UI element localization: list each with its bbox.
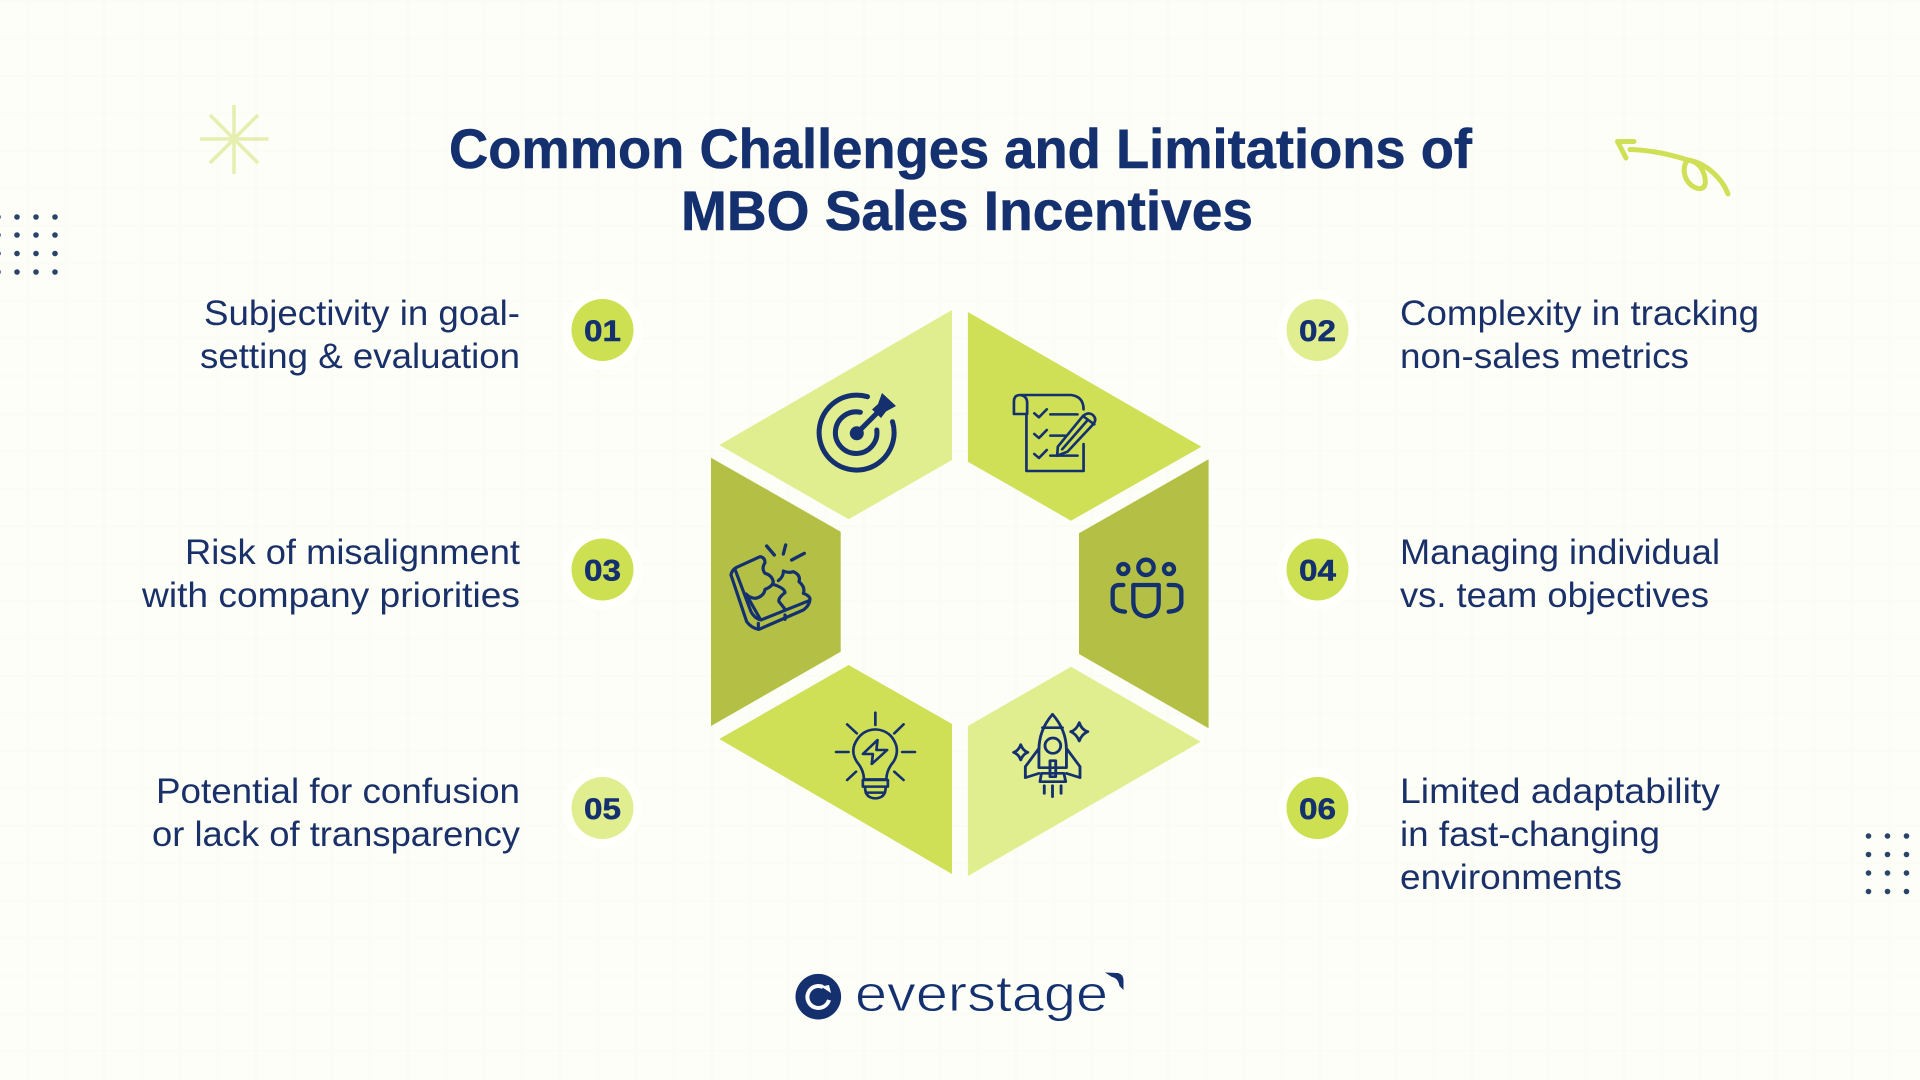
logo: everstage [796,965,1124,1022]
challenge 04 text: Managing individual [1400,533,1720,572]
challenge 02 text [1400,294,1759,376]
title: MBO Sales Incentives [681,179,1253,242]
challenge 01 text: Subjectivity in goal- [204,294,520,333]
icon: target with arrow [819,393,896,470]
logo wordmark: everstage [855,965,1108,1022]
segment: top right [968,312,1201,521]
segment: bottom left [719,665,952,874]
icon: checklist and pencil [1014,395,1095,471]
number badge 02 [1278,290,1358,370]
challenge 06 text [1400,772,1721,897]
number badge 06: 06 [1299,793,1336,826]
logo mark [796,974,841,1020]
hexagon diagram [711,310,1209,876]
decorative star [200,105,268,174]
challenge 05 text: or lack of transparency [152,815,521,854]
challenge 01 text [200,294,520,376]
number badge 02: 02 [1299,315,1336,348]
challenge 06 text: Limited adaptability [1400,772,1721,811]
challenge 01 text: setting & evaluation [200,337,520,376]
number badge 01 [562,290,642,370]
dot grid: top left [0,214,58,275]
challenge 02 text: non-sales metrics [1400,337,1689,376]
challenge 03 text: with company priorities [141,576,520,615]
number badge 04: 04 [1299,554,1336,588]
number badge 05: 05 [584,793,621,826]
challenge 05 text [152,772,521,854]
number badge 01: 01 [584,315,621,348]
segment: top left [719,310,952,519]
logo corner mark [1105,972,1124,990]
challenge 06 text: environments [1400,858,1622,897]
decorative curly arrow [1618,142,1728,194]
challenge 06 text: in fast-changing [1400,815,1660,854]
title [449,117,1472,242]
segment: left [711,458,841,726]
number badge 03: 03 [584,554,621,588]
challenge 03 text [141,533,520,615]
icon: puzzle pieces [731,545,810,629]
number badge 05 [562,768,642,848]
title: Common Challenges and Limitations of [449,117,1472,180]
challenge 04 text: vs. team objectives [1400,576,1709,615]
number badge 06 [1278,768,1358,848]
number badge 04 [1278,530,1358,610]
challenge 04 text [1400,533,1720,615]
challenge 05 text: Potential for confusion [156,772,520,811]
segment: right [1079,459,1209,728]
number badge 03 [562,530,642,610]
icon: rocket [1014,714,1088,797]
icon: light bulb [836,713,915,798]
dot grid: bottom right [1866,833,1909,894]
icon: team of people [1113,560,1181,616]
segment: bottom right [968,667,1201,876]
challenge 03 text: Risk of misalignment [185,533,520,572]
challenge 02 text: Complexity in tracking [1400,294,1759,333]
